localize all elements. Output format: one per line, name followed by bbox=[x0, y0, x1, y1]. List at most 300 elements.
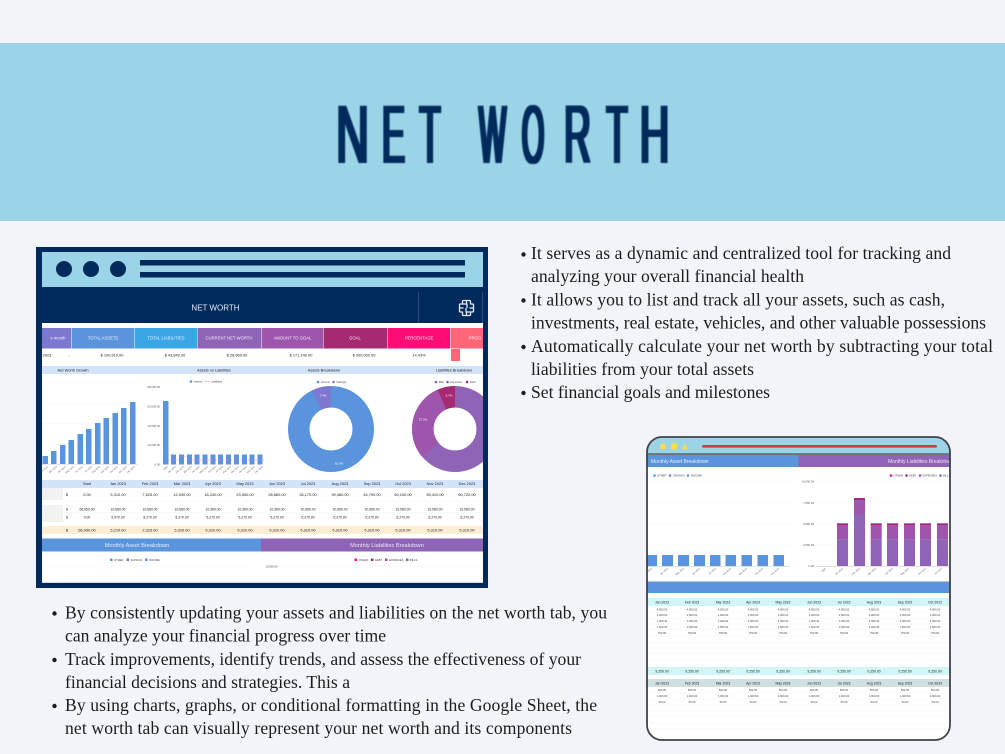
table: monthly net worth: 39,480.00 bbox=[331, 492, 349, 497]
summary header cells: s month bbox=[51, 336, 66, 340]
table: monthly income: 4,000.00 bbox=[930, 608, 941, 612]
summary values: $ 28,860.00 bbox=[227, 352, 248, 358]
bar chart: assets vs liabilities: Mar 2023 bbox=[183, 465, 193, 474]
bar chart: monthly assets: Nov 2023 bbox=[771, 568, 780, 576]
summary values bbox=[43, 349, 460, 361]
table: monthly income: 750.00 bbox=[810, 631, 819, 635]
table: monthly income: 9,250.00 bbox=[867, 670, 881, 674]
table: monthly income: 2,000.00 bbox=[930, 613, 941, 617]
table: monthly net worth: 0.00 bbox=[84, 516, 90, 520]
table: monthly net worth: Feb 2023 bbox=[142, 481, 158, 486]
table: monthly savings: 500.00 bbox=[719, 688, 728, 692]
table: monthly net worth: 66,090.00 bbox=[78, 528, 96, 532]
table: monthly net worth: $ bbox=[66, 492, 69, 497]
summary values: $ 200,000.00 bbox=[353, 352, 376, 358]
table: monthly savings: 50.00 bbox=[780, 700, 787, 704]
summary header cells: AMOUNT TO GOAL bbox=[274, 336, 312, 340]
text block: features list: liabilities from your total assets bbox=[531, 359, 754, 379]
table: monthly savings: 50.00 bbox=[902, 700, 909, 704]
bar chart: assets vs liabilities: Aug 2023 bbox=[222, 465, 232, 474]
table: monthly income: 9,250.00 bbox=[746, 670, 760, 674]
text block: features list bbox=[521, 243, 993, 402]
table: monthly savings bbox=[648, 679, 949, 703]
table: monthly income: 1,500.00 bbox=[778, 625, 789, 629]
table: monthly savings: 1,000.00 bbox=[869, 694, 880, 698]
legend: OTHER bbox=[657, 474, 666, 478]
bar chart: assets vs liabilities: May 2023 bbox=[200, 466, 209, 474]
table: monthly net worth: Start bbox=[83, 481, 92, 486]
bar chart: assets vs liabilities: 80,000.00 bbox=[148, 385, 160, 389]
table: monthly net worth: 10,580.00 bbox=[142, 508, 158, 512]
table: monthly net worth: Apr 2023 bbox=[205, 481, 221, 486]
bar chart: monthly liabilities: 7,500.00 bbox=[803, 501, 814, 505]
bar chart: monthly liabilities: Jun 2023 bbox=[918, 568, 927, 576]
table: monthly net worth: 28,860.00 bbox=[268, 492, 286, 497]
text block: progress tracking list: Track improvements, identify trends, and assess the effectiveness of your bbox=[65, 649, 581, 669]
table: monthly savings: 500.00 bbox=[840, 688, 849, 692]
bar chart: net worth growth: Mar 2023 bbox=[48, 465, 58, 474]
legend: BILLS bbox=[943, 474, 951, 478]
table: monthly savings: Jan 2023 bbox=[655, 682, 669, 686]
table: monthly net worth: 5,270.00 bbox=[333, 516, 347, 520]
table: monthly net worth: 10,580.00 bbox=[427, 508, 443, 512]
chart headings strip bbox=[42, 366, 483, 374]
table: monthly income: 1,000.00 bbox=[869, 619, 880, 623]
window frame right edge bbox=[483, 323, 488, 588]
table: monthly net worth: Jan 2023 bbox=[110, 481, 126, 486]
table: monthly income: 1,000.00 bbox=[687, 619, 698, 623]
summary header cells: PROG bbox=[469, 336, 481, 340]
table: monthly income: 2,000.00 bbox=[657, 613, 668, 617]
table: monthly income: 750.00 bbox=[719, 631, 728, 635]
window title bar bbox=[647, 437, 950, 455]
table: monthly net worth bbox=[42, 480, 483, 534]
bar chart: net worth growth: Apr 2023 bbox=[58, 465, 67, 474]
bar chart: monthly assets: Oct 2023 bbox=[755, 567, 764, 576]
table: monthly net worth: 5,970.00 bbox=[111, 516, 125, 520]
table: monthly net worth: $ bbox=[66, 528, 69, 532]
breakdown legends: 10,000.00 bbox=[266, 564, 278, 568]
summary header cells: TOTAL LIABILITIES bbox=[147, 336, 185, 340]
table: monthly income: 4,000.00 bbox=[869, 608, 880, 612]
table: monthly income: 1,500.00 bbox=[687, 625, 698, 629]
table: monthly income: 1,500.00 bbox=[930, 625, 941, 629]
table: monthly net worth: Aug 2023 bbox=[332, 481, 348, 486]
table: monthly net worth: Nov 2023 bbox=[427, 481, 443, 486]
legend: Income bbox=[321, 380, 330, 384]
table: monthly net worth: 10,580.00 bbox=[110, 508, 126, 512]
table: monthly savings: 500.00 bbox=[658, 688, 667, 692]
dashboard sheet background bbox=[42, 323, 483, 583]
table: monthly income: Jun 2023 bbox=[807, 600, 821, 604]
legend: Debt bbox=[470, 380, 476, 384]
legend bbox=[317, 380, 347, 384]
chart headings strip: Assets vs Liabilities bbox=[197, 368, 231, 372]
panel: monthly breakdown window bbox=[643, 437, 954, 740]
breakdown banners: Monthly Liabilities Breakdown bbox=[888, 459, 954, 465]
table: monthly income: 750.00 bbox=[931, 631, 940, 635]
table: monthly net worth: 10,580.00 bbox=[395, 508, 411, 512]
table: monthly income: 1,000.00 bbox=[778, 619, 789, 623]
table: monthly income: 4,000.00 bbox=[748, 608, 759, 612]
table: monthly income: 1,000.00 bbox=[748, 619, 759, 623]
table: monthly income: 1,500.00 bbox=[718, 625, 729, 629]
table: monthly income: 1,500.00 bbox=[657, 625, 668, 629]
table: monthly savings: May 2023 bbox=[776, 682, 791, 686]
text block: progress tracking list: By consistently updating your assets and liabilities on the net worth tab, you bbox=[65, 602, 607, 622]
title: T bbox=[419, 90, 441, 181]
table: monthly net worth: 23,550.00 bbox=[236, 492, 254, 497]
table: monthly net worth: 5,210.00 bbox=[110, 528, 126, 532]
table: monthly savings: Sep 2023 bbox=[898, 682, 912, 686]
table: monthly income: 750.00 bbox=[688, 631, 697, 635]
bar chart: monthly liabilities bbox=[802, 474, 951, 576]
summary values: 14.43% bbox=[412, 352, 426, 358]
table: monthly net worth: 44,790.00 bbox=[363, 492, 381, 497]
table: monthly income: 2,000.00 bbox=[900, 613, 911, 617]
table: monthly income: 9,250.00 bbox=[898, 670, 912, 674]
bar chart: monthly liabilities: Mar 2023 bbox=[867, 567, 877, 576]
breakdown legends: OTHER bbox=[358, 558, 368, 562]
table: monthly savings: 500.00 bbox=[901, 688, 910, 692]
table: monthly savings: 1,000.00 bbox=[900, 694, 911, 698]
legend: INCOME bbox=[691, 474, 702, 478]
bar chart: monthly assets bbox=[643, 474, 790, 576]
table: monthly income: 1,000.00 bbox=[657, 619, 668, 623]
legend: Liabilities bbox=[211, 380, 223, 384]
text block: features list: Automatically calculate your net worth by subtracting your total bbox=[531, 336, 993, 356]
bar chart: assets vs liabilities: Jan 2023 bbox=[168, 466, 177, 474]
bar chart: net worth growth: Jun 2023 bbox=[75, 466, 84, 474]
table: monthly income: 9,250.00 bbox=[685, 670, 699, 674]
table: monthly income: Apr 2023 bbox=[746, 600, 760, 604]
chart headings strip: Liabilities Breakdown bbox=[436, 368, 472, 372]
summary header cells: GOAL bbox=[349, 336, 361, 340]
text block: features list: investments, real estate, vehicles, and other valuable possessions bbox=[531, 312, 986, 332]
table: monthly net worth: 10,580.00 bbox=[205, 508, 221, 512]
bar chart: net worth growth: Nov 2023 bbox=[119, 466, 128, 474]
bar chart: assets vs liabilities bbox=[148, 380, 264, 474]
table: monthly savings: 1,000.00 bbox=[778, 694, 789, 698]
table: monthly income: Sep 2023 bbox=[898, 600, 912, 604]
legend: EXPENSES bbox=[922, 474, 937, 478]
bar chart: net worth growth: Dec 2023 bbox=[127, 466, 136, 474]
legend: DEBT bbox=[909, 474, 917, 478]
table: monthly income: Feb 2023 bbox=[685, 600, 699, 604]
table: monthly net worth: 0.00 bbox=[83, 492, 92, 497]
donut chart: assets breakdown: 92.6% bbox=[335, 462, 344, 466]
table: monthly savings: 1,000.00 bbox=[748, 694, 759, 698]
table: monthly net worth: 5,270.00 bbox=[460, 516, 474, 520]
table: monthly income: 4,000.00 bbox=[687, 608, 698, 612]
banner background bbox=[0, 43, 1005, 221]
title: W bbox=[479, 89, 506, 181]
legend: Savings bbox=[336, 380, 347, 384]
bar chart: assets vs liabilities: 60,000.00 bbox=[148, 404, 160, 408]
bar chart: assets vs liabilities: Nov 2023 bbox=[247, 466, 256, 474]
summary header cells bbox=[42, 328, 483, 348]
summary values: $ 190,610.00 bbox=[101, 352, 124, 358]
table: monthly income: 2,000.00 bbox=[718, 613, 729, 617]
table: monthly income: 4,000.00 bbox=[900, 608, 911, 612]
bar chart: net worth growth: Jul 2023 bbox=[85, 466, 93, 473]
table: monthly savings: Feb 2023 bbox=[685, 682, 699, 686]
table: monthly net worth: Sep 2023 bbox=[364, 481, 380, 486]
table: monthly savings: Oct 2023 bbox=[928, 682, 942, 686]
table: monthly income: Jul 2023 bbox=[838, 600, 851, 604]
bar chart: monthly assets: Jun 2023 bbox=[692, 568, 701, 576]
table: monthly income: Jan 2023 bbox=[655, 600, 669, 604]
table: monthly net worth: 10,580.00 bbox=[174, 508, 190, 512]
legend: Expenses bbox=[450, 380, 463, 384]
table: monthly savings: 1,000.00 bbox=[657, 694, 668, 698]
table: monthly income: 4,000.00 bbox=[839, 608, 850, 612]
summary values: $ 171,140.00 bbox=[290, 352, 313, 358]
bar chart: monthly liabilities: Jan 2023 bbox=[835, 568, 844, 576]
breakdown legends: DEBT bbox=[375, 558, 383, 562]
table: monthly net worth: May 2023 bbox=[236, 481, 254, 486]
table: monthly income: 9,250.00 bbox=[716, 670, 730, 674]
table: monthly income: 750.00 bbox=[901, 631, 910, 635]
table: monthly net worth: 5,310.00 bbox=[364, 528, 380, 532]
bar chart: monthly assets: Jul 2023 bbox=[709, 568, 717, 575]
title: T bbox=[606, 90, 628, 181]
bar chart: net worth growth: May 2023 bbox=[66, 466, 75, 474]
donut chart: liabilities breakdown bbox=[412, 380, 483, 472]
table: monthly net worth: 5,310.00 bbox=[427, 528, 443, 532]
text block: features list: It serves as a dynamic and centralized tool for tracking and bbox=[531, 243, 951, 263]
text block: features list: Set financial goals and milestones bbox=[531, 382, 770, 402]
table: monthly savings: 500.00 bbox=[688, 688, 697, 692]
bar chart: assets vs liabilities: 40,000.00 bbox=[148, 424, 160, 428]
table: monthly income: May 2023 bbox=[776, 600, 791, 604]
table: monthly net worth: 10,580.00 bbox=[237, 508, 253, 512]
table: monthly net worth: Dec 2023 bbox=[459, 481, 475, 486]
table: monthly income: 750.00 bbox=[658, 631, 667, 635]
breakdown legends: EXPENSES bbox=[389, 558, 404, 562]
bar chart: assets vs liabilities: Jul 2023 bbox=[216, 466, 224, 473]
bar chart: monthly liabilities: 5,000.00 bbox=[803, 522, 814, 526]
breakdown banners bbox=[647, 455, 954, 467]
table: monthly savings: 500.00 bbox=[870, 688, 879, 692]
bar chart: net worth growth: Sep 2023 bbox=[101, 466, 110, 474]
table: monthly net worth: 12,930.00 bbox=[173, 492, 191, 497]
table: monthly net worth: 5,270.00 bbox=[270, 516, 284, 520]
table: monthly net worth: 18,240.00 bbox=[204, 492, 222, 497]
title: N bbox=[336, 90, 369, 181]
bar chart: assets vs liabilities: Dec 2023 bbox=[255, 466, 264, 474]
window outline bbox=[647, 437, 950, 740]
legend bbox=[653, 474, 702, 477]
table: monthly income: 2,000.00 bbox=[809, 613, 820, 617]
table: monthly savings: 500.00 bbox=[779, 688, 788, 692]
summary values: 2023 bbox=[43, 352, 51, 358]
table: monthly net worth: 5,270.00 bbox=[301, 516, 315, 520]
table: monthly income: 2,000.00 bbox=[839, 613, 850, 617]
bar chart: assets vs liabilities: 0.00 bbox=[155, 462, 160, 466]
table: monthly net worth: Mar 2023 bbox=[174, 481, 190, 486]
title: O bbox=[522, 89, 544, 181]
table: monthly income: 2,000.00 bbox=[869, 613, 880, 617]
table: monthly net worth: 5,310.00 bbox=[237, 528, 253, 532]
table: monthly income: 1,500.00 bbox=[869, 625, 880, 629]
table: monthly net worth: 5,310.00 bbox=[269, 528, 285, 532]
table: monthly income: 750.00 bbox=[779, 631, 788, 635]
table: monthly net worth: 5,310.00 bbox=[300, 528, 316, 532]
table: monthly net worth: 55,410.00 bbox=[426, 492, 444, 497]
table: monthly income: 1,000.00 bbox=[930, 619, 941, 623]
legend bbox=[434, 380, 476, 384]
bar chart: net worth growth: Aug 2023 bbox=[91, 465, 101, 474]
table: monthly income: 1,000.00 bbox=[718, 619, 729, 623]
legend bbox=[190, 380, 223, 384]
legend: Bills bbox=[439, 380, 445, 384]
bar chart: assets vs liabilities: Feb 2023 bbox=[176, 466, 185, 474]
table: monthly net worth: 2,315.00 bbox=[142, 528, 158, 532]
bar chart: monthly assets: Aug 2023 bbox=[722, 567, 732, 576]
title: R bbox=[564, 89, 591, 181]
table: monthly net worth: 5,310.00 bbox=[174, 528, 190, 532]
bar chart: assets vs liabilities: Jun 2023 bbox=[208, 466, 217, 474]
section divider band bbox=[647, 582, 950, 593]
table: monthly savings: 50.00 bbox=[932, 700, 939, 704]
legend bbox=[890, 474, 950, 477]
table: monthly income: 1,500.00 bbox=[809, 625, 820, 629]
table: monthly net worth: 10,580.00 bbox=[364, 508, 380, 512]
sheet heading: NET WORTH bbox=[191, 304, 240, 312]
bar chart: monthly liabilities: Apr 2023 bbox=[885, 567, 894, 576]
summary header cells: PERCENTAGE bbox=[405, 336, 433, 340]
title bbox=[336, 88, 669, 181]
bar chart: monthly liabilities: May 2023 bbox=[901, 568, 910, 576]
table: monthly savings: 50.00 bbox=[659, 700, 666, 704]
table: monthly net worth: 5,270.00 bbox=[238, 516, 252, 520]
table: monthly net worth: 5,310.00 bbox=[459, 528, 475, 532]
table: monthly savings: 1,000.00 bbox=[687, 694, 698, 698]
donut chart: assets breakdown bbox=[288, 380, 374, 472]
table: monthly income: 2,000.00 bbox=[748, 613, 759, 617]
table: monthly net worth: 5,270.00 bbox=[428, 516, 442, 520]
bar chart: monthly liabilities: Jul 2023 bbox=[935, 568, 943, 575]
table: monthly savings: 1,000.00 bbox=[930, 694, 941, 698]
monthly breakdown banners: Monthly Liabilities Breakdown bbox=[350, 543, 424, 549]
table: monthly net worth: 5,270.00 bbox=[175, 516, 189, 520]
bar chart: monthly liabilities: 2,500.00 bbox=[803, 543, 814, 547]
table: monthly net worth: 10,580.00 bbox=[269, 508, 285, 512]
table: monthly income: 750.00 bbox=[870, 631, 879, 635]
table: monthly income: 750.00 bbox=[840, 631, 849, 635]
table: monthly savings: 500.00 bbox=[931, 688, 940, 692]
text block: progress tracking list: can analyze your financial progress over time bbox=[65, 626, 386, 646]
table: monthly income: Aug 2023 bbox=[867, 600, 881, 604]
bar chart: assets vs liabilities: Sep 2023 bbox=[231, 466, 240, 474]
bar chart: assets vs liabilities: 20,000.00 bbox=[148, 443, 160, 447]
table: monthly income: 4,000.00 bbox=[778, 608, 789, 612]
table: monthly savings: 500.00 bbox=[810, 688, 819, 692]
table: monthly net worth: 5,270.00 bbox=[396, 516, 410, 520]
bar chart: assets vs liabilities: Oct 2023 bbox=[239, 465, 248, 474]
table: monthly net worth: 10,580.00 bbox=[300, 508, 316, 512]
table: monthly income: 2,000.00 bbox=[778, 613, 789, 617]
table: monthly income: 9,250.00 bbox=[655, 670, 669, 674]
table: monthly savings: Jul 2023 bbox=[838, 682, 851, 686]
table: monthly savings: 50.00 bbox=[841, 700, 848, 704]
bar chart: monthly assets: Mar 2023 bbox=[643, 567, 653, 576]
breakdown legends: BILLS bbox=[410, 558, 418, 562]
table: monthly net worth: 5,310.00 bbox=[110, 492, 126, 497]
text block: features list: analyzing your overall financial health bbox=[531, 266, 804, 286]
chart headings strip: Net Worth Growth bbox=[57, 368, 89, 372]
table: monthly net worth: 5,270.00 bbox=[365, 516, 379, 520]
bar chart: monthly assets: Apr 2023 bbox=[660, 567, 669, 576]
table: monthly net worth: 8,270.00 bbox=[143, 516, 157, 520]
table: monthly net worth: Oct 2023 bbox=[395, 481, 411, 486]
table: monthly income: 9,250.00 bbox=[807, 670, 821, 674]
text block: progress tracking list: financial decisions and strategies. This a bbox=[65, 672, 350, 692]
table: monthly income: 1,500.00 bbox=[839, 625, 850, 629]
donut chart: liabilities breakdown: 27.3% bbox=[419, 418, 428, 422]
table: monthly savings: 50.00 bbox=[689, 700, 696, 704]
window title bar bbox=[42, 252, 483, 287]
table: monthly net worth: $ bbox=[66, 516, 68, 520]
table: monthly income: 9,250.00 bbox=[837, 670, 851, 674]
donut chart: liabilities breakdown: 6.7% bbox=[446, 394, 453, 398]
table: monthly net worth: Jun 2023 bbox=[269, 481, 285, 486]
table: monthly income: 9,250.00 bbox=[776, 670, 790, 674]
window body bbox=[647, 437, 950, 740]
table: monthly income: 1,000.00 bbox=[809, 619, 820, 623]
table: monthly net worth: 10,580.00 bbox=[459, 508, 475, 512]
table: monthly net worth: $ bbox=[66, 508, 68, 512]
table: monthly income: 1,500.00 bbox=[900, 625, 911, 629]
table: monthly net worth: 60,720.00 bbox=[458, 492, 476, 497]
table: monthly savings: 50.00 bbox=[720, 700, 727, 704]
icon: knot logo bbox=[460, 300, 474, 316]
table: monthly savings: 50.00 bbox=[750, 700, 757, 704]
breakdown legends: SAVINGS bbox=[130, 558, 142, 562]
summary values: $ 43,840.00 bbox=[165, 352, 186, 358]
table: monthly net worth: 66,650.00 bbox=[79, 508, 95, 512]
table: monthly income: 9,250.00 bbox=[928, 670, 942, 674]
bar chart: monthly liabilities: Start bbox=[821, 567, 827, 573]
table: monthly savings: 50.00 bbox=[871, 700, 878, 704]
table: monthly net worth: 5,310.00 bbox=[205, 528, 221, 532]
sheet heading bbox=[42, 291, 483, 323]
table: monthly income: 1,000.00 bbox=[900, 619, 911, 623]
chart headings strip: Assets Breakdown bbox=[308, 368, 340, 372]
text block: progress tracking list: By using charts, graphs, or conditional formatting in the Google Sheet, the bbox=[65, 695, 597, 715]
table: monthly savings: Apr 2023 bbox=[746, 682, 760, 686]
table: monthly net worth: 50,100.00 bbox=[394, 492, 412, 497]
table: monthly income: 4,000.00 bbox=[718, 608, 729, 612]
panel: net worth dashboard window bbox=[36, 247, 500, 588]
table: monthly net worth: 10,580.00 bbox=[332, 508, 348, 512]
table: monthly savings: Aug 2023 bbox=[867, 682, 881, 686]
bar chart: monthly liabilities: 10,000.00 bbox=[802, 480, 814, 484]
summary header cells: TOTAL ASSETS bbox=[88, 336, 118, 340]
table: monthly savings: Jun 2023 bbox=[807, 682, 821, 686]
text block: progress tracking list bbox=[52, 602, 607, 738]
bar chart: monthly assets: Sep 2023 bbox=[739, 568, 748, 576]
legend: OTHER bbox=[894, 474, 903, 478]
table: monthly net worth: 5,310.00 bbox=[395, 528, 411, 532]
bar chart: net worth growth: Oct 2023 bbox=[110, 465, 119, 474]
table: monthly savings: 1,000.00 bbox=[718, 694, 729, 698]
bar chart: monthly assets: May 2023 bbox=[676, 568, 685, 576]
donut chart: assets breakdown: 7.4% bbox=[320, 394, 327, 398]
table: monthly income: 2,000.00 bbox=[687, 613, 698, 617]
text block: progress tracking list: net worth tab can visually represent your net worth and its components bbox=[65, 718, 572, 738]
